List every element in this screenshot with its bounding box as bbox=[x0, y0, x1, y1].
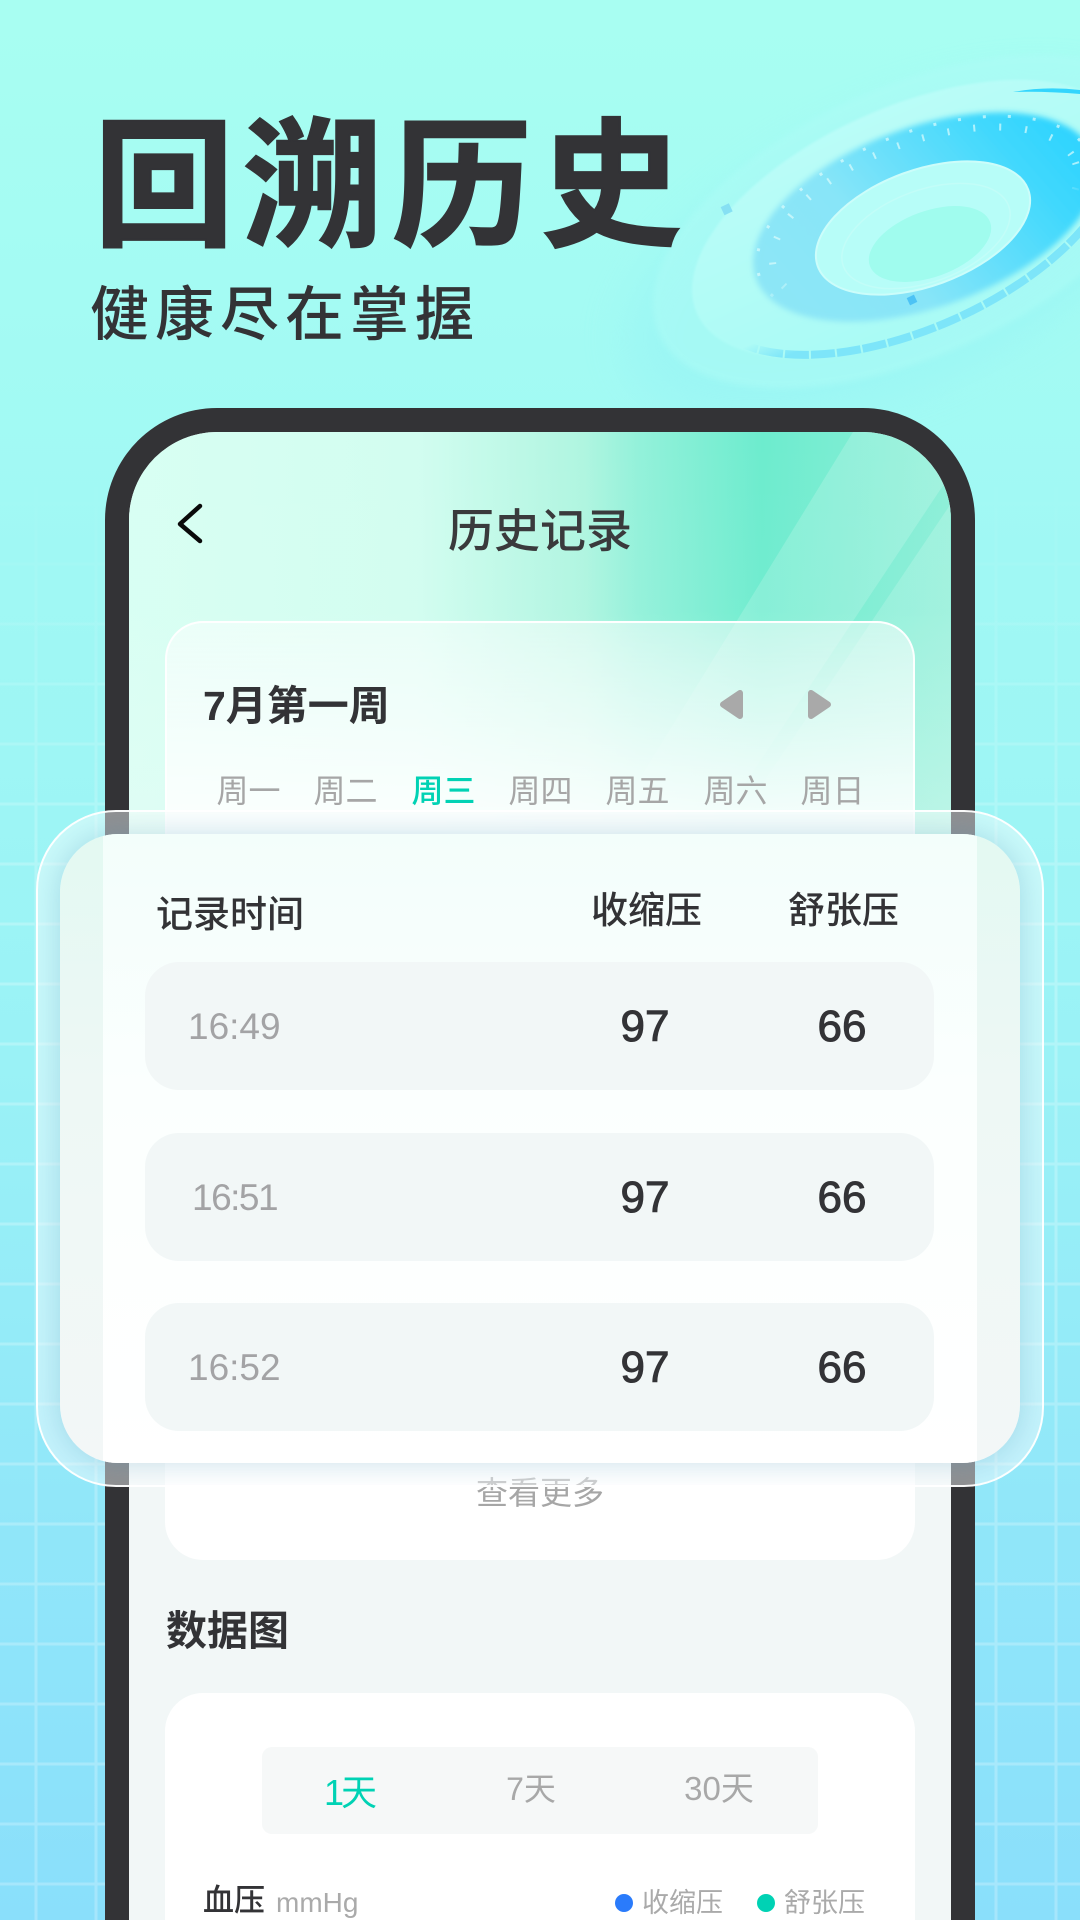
range tabs bbox=[262, 1747, 818, 1834]
table row 1 bbox=[145, 962, 934, 1090]
weekday row: 周日 bbox=[800, 773, 864, 809]
panel: week calendar and records card bbox=[165, 621, 915, 1560]
chart unit: mmHg bbox=[276, 1887, 358, 1918]
legend: diastolic: 舒张压 bbox=[784, 1888, 865, 1918]
weekday row: 周三 bbox=[411, 773, 476, 809]
inner panel bbox=[60, 834, 1020, 1463]
phone screen bbox=[129, 432, 951, 1920]
center highlight band bbox=[103, 834, 977, 1463]
tab: 30 days: 30天 bbox=[684, 1770, 754, 1807]
subtitle: 健康尽在掌握 bbox=[90, 267, 480, 352]
week arrows bbox=[720, 690, 831, 719]
weekday row bbox=[216, 773, 864, 809]
weekday row: 周二 bbox=[313, 773, 378, 809]
view more link: 查看更多 bbox=[476, 1475, 604, 1511]
tab: 7 days: 7天 bbox=[506, 1771, 556, 1807]
table row 2 bbox=[145, 1133, 934, 1261]
table heading: diastolic: 舒张压 bbox=[788, 890, 899, 931]
table heading: record time: 记录时间 bbox=[156, 894, 304, 935]
table row 2: 16:51 bbox=[192, 1177, 277, 1218]
weekday row: 周六 bbox=[703, 773, 768, 809]
decorative swirl rings bbox=[692, 80, 1080, 359]
table row 1: 66 bbox=[818, 1002, 866, 1051]
tab: 1 day: 1天 bbox=[324, 1772, 374, 1813]
title: 回溯历史 bbox=[94, 74, 690, 276]
table row 3: 66 bbox=[818, 1343, 866, 1392]
glass panel: record table bbox=[36, 810, 1044, 1487]
table row 2: 66 bbox=[818, 1173, 866, 1222]
table row 1: 16:49 bbox=[188, 1006, 281, 1047]
chart label: blood pressure: 血压 bbox=[203, 1883, 265, 1918]
legend: systolic: 收缩压 bbox=[642, 1888, 723, 1918]
table row 3: 97 bbox=[621, 1343, 669, 1392]
table row 2: 97 bbox=[621, 1173, 669, 1222]
section heading: data chart: 数据图 bbox=[166, 1608, 289, 1654]
weekday row: 周五 bbox=[605, 773, 670, 809]
panel: data chart card bbox=[165, 1693, 915, 1920]
table heading: systolic: 收缩压 bbox=[591, 890, 702, 931]
weekday row: 周一 bbox=[216, 773, 280, 809]
screen title: 历史记录 bbox=[448, 505, 632, 557]
table row 3: 16:52 bbox=[188, 1347, 281, 1388]
background grid bbox=[0, 636, 1080, 1920]
table row 3 bbox=[145, 1303, 934, 1431]
week heading: 7月第一周 bbox=[203, 683, 390, 729]
phone frame bbox=[105, 408, 975, 1920]
back arrow bbox=[178, 504, 202, 544]
screen header gradient bbox=[129, 432, 951, 834]
table row 1: 97 bbox=[621, 1002, 669, 1051]
weekday row: 周四 bbox=[508, 773, 572, 809]
